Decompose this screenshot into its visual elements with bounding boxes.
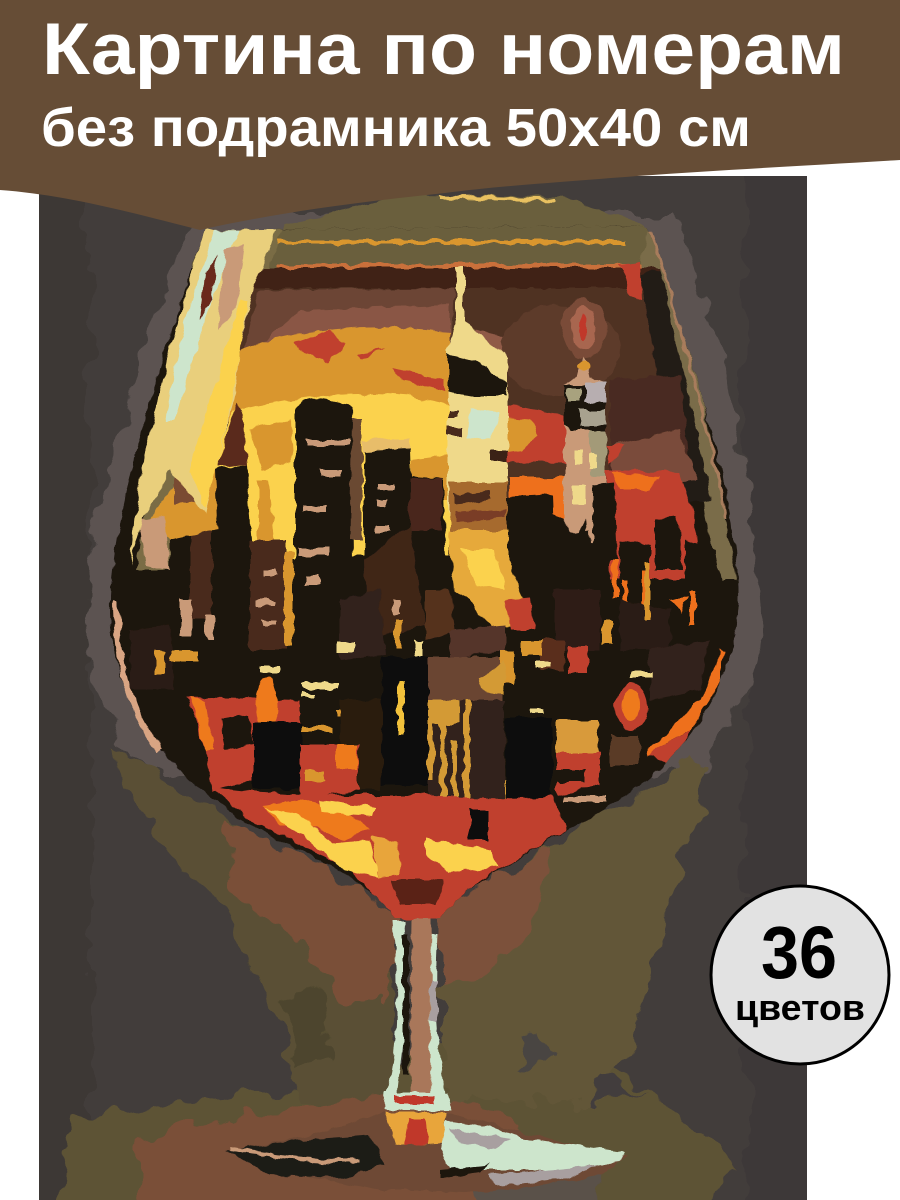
subtitle: без подрамника 50х40 см [41, 98, 751, 158]
glass base [226, 1112, 628, 1191]
red and orange right sky [508, 405, 566, 463]
right black block and reflections [506, 717, 552, 807]
bowl bottom glow [212, 787, 566, 918]
small left tower [217, 403, 247, 468]
sunset sky [228, 326, 451, 426]
city silhouettes [100, 398, 750, 700]
ornate yellow reflection [426, 664, 506, 799]
tower lower glow [448, 530, 532, 628]
sky streaks [295, 330, 345, 362]
brown building detail [130, 420, 710, 700]
stem foot ring [383, 1092, 452, 1110]
glass rim band [283, 194, 644, 231]
painting background [79, 176, 756, 1200]
building windows [180, 440, 400, 640]
bowl edge highlights [116, 600, 160, 750]
orange drips on the right [612, 560, 695, 625]
right tower [564, 356, 606, 545]
reflection dark zone [382, 657, 428, 785]
glass bowl [100, 190, 760, 918]
candle glow [562, 298, 606, 358]
header banner [0, 0, 900, 230]
central light tower [446, 266, 510, 532]
outer glass edge [120, 225, 285, 700]
left fringe [140, 465, 275, 570]
upper glass band [192, 224, 658, 269]
title: Картина по номерам [42, 9, 845, 90]
glass stem [383, 918, 452, 1110]
left glass highlight [130, 226, 278, 565]
red corner patch [620, 262, 642, 300]
painting [20, 160, 825, 1200]
liquid upper tone [240, 268, 660, 498]
badge: 36 colours: 36 [761, 911, 837, 994]
background blotches [56, 210, 764, 1200]
badge: 36 colours: цветов [735, 987, 865, 1028]
left reflection reds [187, 697, 300, 790]
badge: 36 colours [711, 886, 889, 1064]
